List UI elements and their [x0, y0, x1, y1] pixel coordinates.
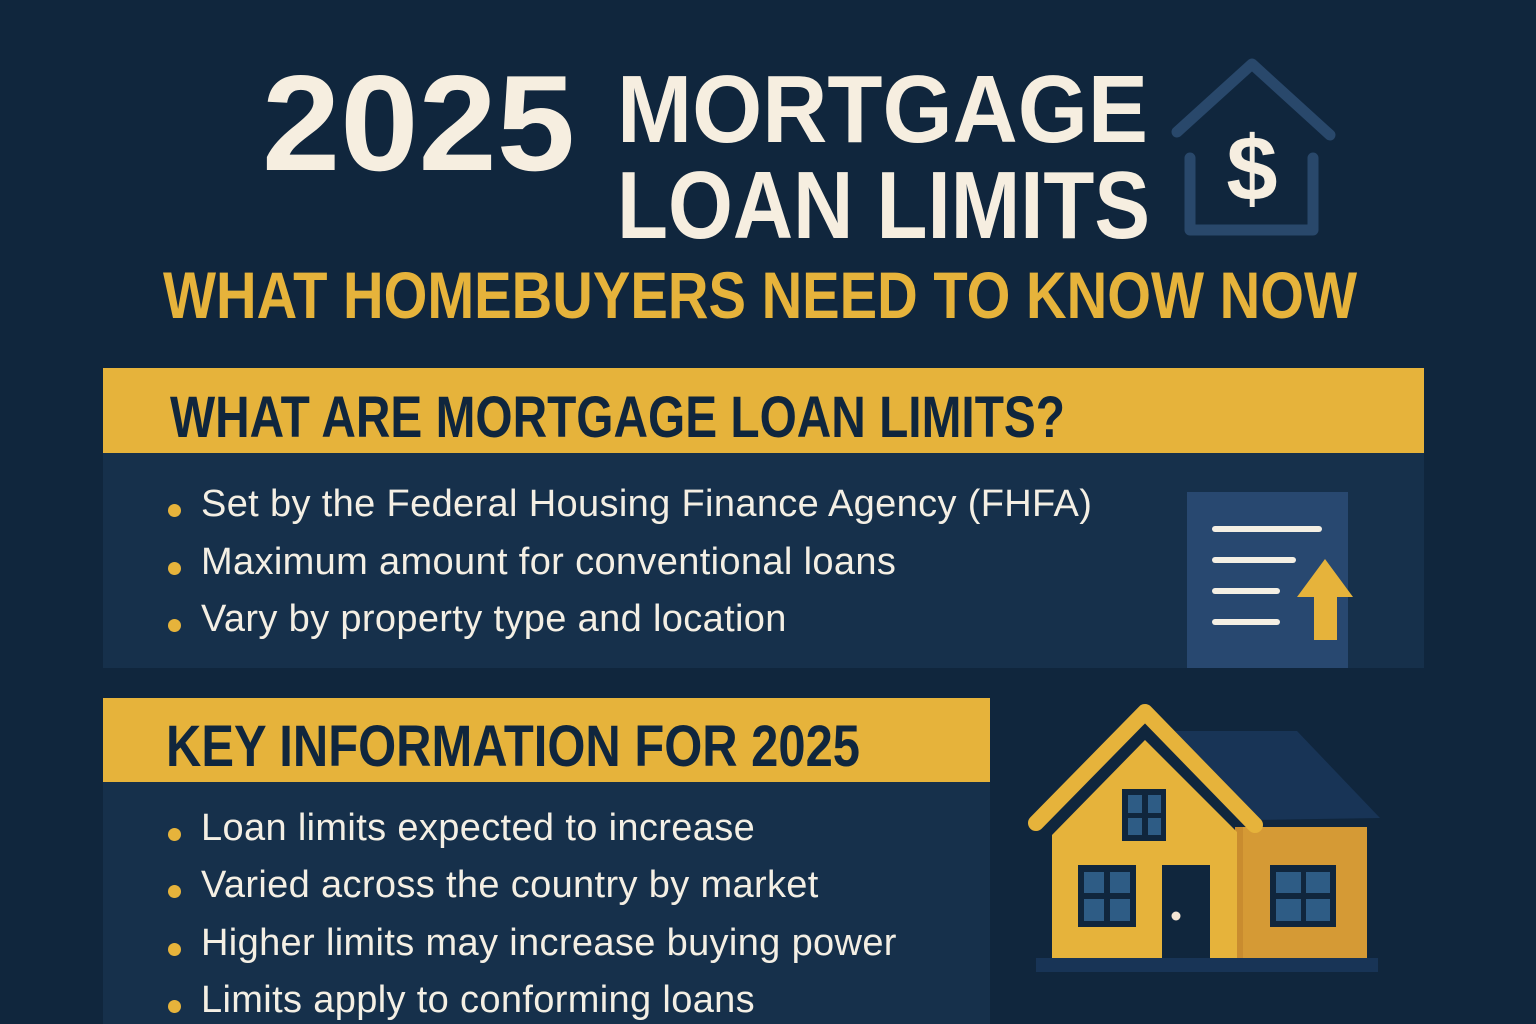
icon: document with up arrow: [1187, 492, 1353, 668]
heading bar: WHAT ARE MORTGAGE LOAN LIMITS?: [170, 385, 1065, 450]
title: mortgage: MORTGAGE: [617, 56, 1148, 163]
heading bar: KEY INFORMATION FOR 2025: [166, 714, 860, 779]
bullet list: Varied across the country by market: [201, 864, 819, 906]
icon: house with dollar: $: [1226, 118, 1278, 220]
bullet list: Maximum amount for conventional loans: [201, 541, 896, 583]
bullet list: Loan limits expected to increase: [201, 807, 755, 849]
bullet list: Vary by property type and location: [201, 598, 787, 640]
panel: what are mortgage loan limits: [103, 368, 1424, 668]
bullet list: [168, 807, 897, 1021]
title: loan limits: LOAN LIMITS: [617, 152, 1150, 259]
heading bar: [103, 368, 1424, 453]
bullet list: Limits apply to conforming loans: [201, 979, 755, 1021]
icon: house illustration: [1028, 704, 1380, 972]
panel: key information for 2025: [103, 698, 990, 1024]
title: 2025: 2025: [262, 47, 575, 199]
subtitle: WHAT HOMEBUYERS NEED TO KNOW NOW: [163, 258, 1358, 332]
bullet list: Higher limits may increase buying power: [201, 922, 897, 964]
title: [163, 47, 1358, 332]
bullet list: Set by the Federal Housing Finance Agency (FHFA): [201, 483, 1092, 525]
icon: house with dollar: [1172, 58, 1336, 236]
bullet list: [168, 483, 1092, 640]
